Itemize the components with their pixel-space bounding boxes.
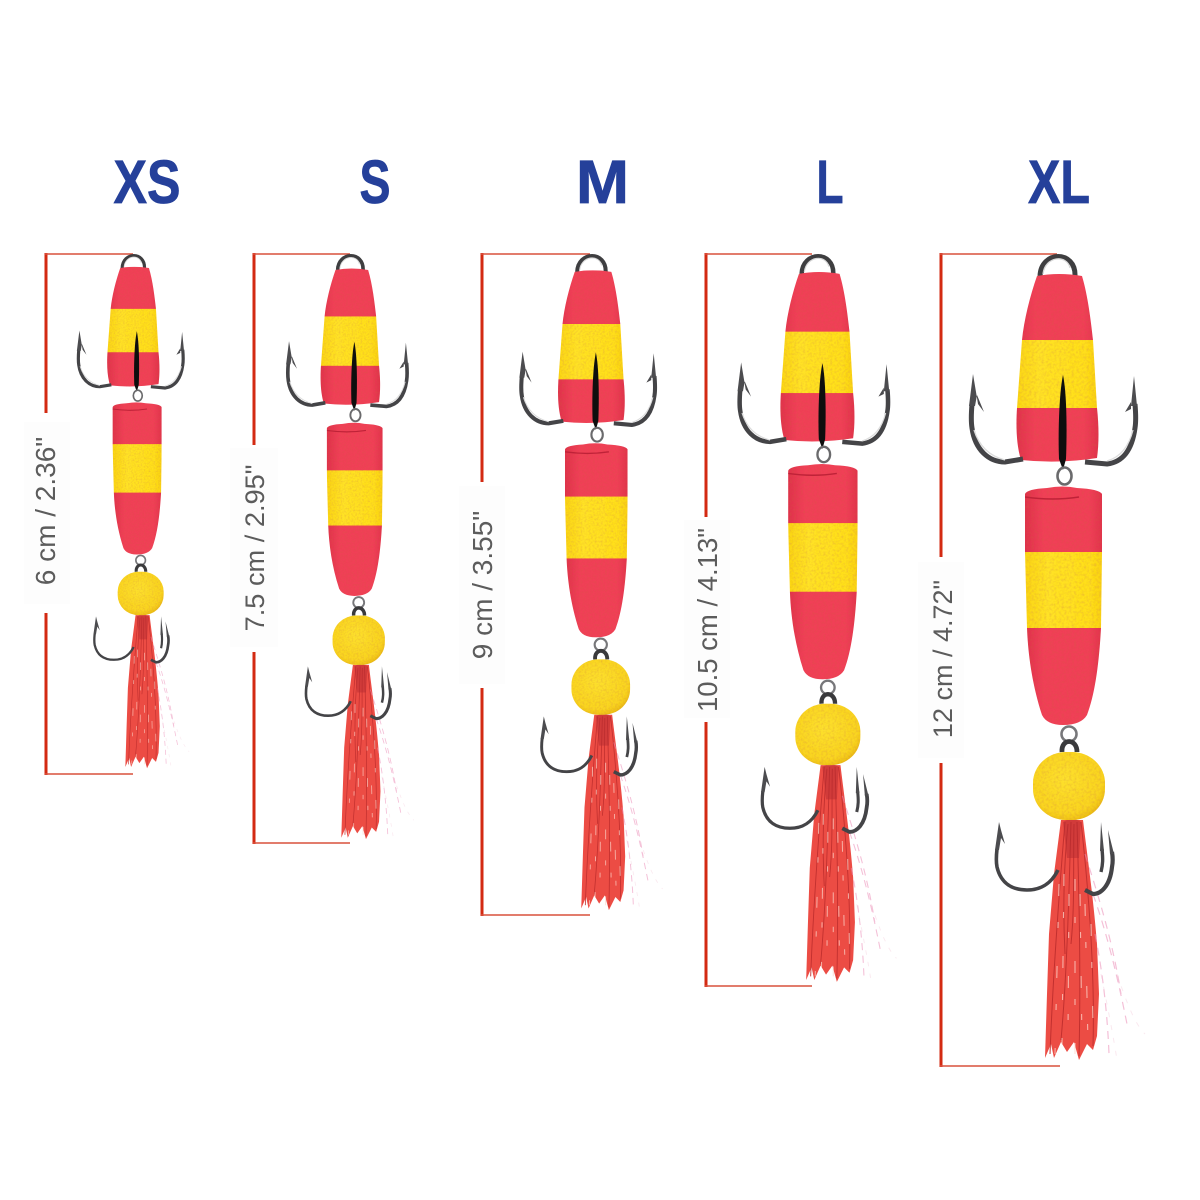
dimension bracket: XS [24, 253, 133, 775]
heading: L: L [816, 148, 844, 216]
tail: M [581, 714, 663, 910]
heading: XS: XS [114, 148, 180, 216]
lure: L [738, 256, 896, 982]
treble hook: XS [77, 331, 184, 401]
size label: L: 10.5 cm / 4.13" [692, 528, 723, 712]
tail: XL [1045, 819, 1145, 1060]
lower float: XL [1022, 482, 1106, 728]
rear hook: M [541, 716, 637, 775]
size label: S: 7.5 cm / 2.95" [239, 465, 270, 631]
tail: L [806, 764, 896, 982]
lower float: XS [111, 399, 164, 556]
dimension bracket: S [230, 253, 350, 844]
top float: XL [1012, 269, 1102, 469]
dimension bracket: XL [918, 253, 1060, 1067]
heading: S: S [360, 148, 390, 216]
dimension bracket: M [459, 253, 590, 916]
lure: S [286, 256, 414, 839]
size label: XL: 12 cm / 4.72" [928, 580, 958, 738]
tail: XS [125, 614, 189, 768]
size label: XS: 6 cm / 2.36" [30, 437, 61, 585]
swivel: S [353, 597, 365, 616]
swivel: M [595, 639, 607, 659]
lure: M [519, 256, 663, 910]
treble hook: XL [969, 374, 1137, 484]
heading: XL: XL [1028, 148, 1090, 216]
rear hook: XS [93, 616, 169, 662]
top float: L [776, 268, 858, 448]
top float: XS [104, 264, 162, 391]
lure: XS [77, 256, 189, 768]
treble hook: M [519, 352, 656, 442]
swivel: L [821, 681, 835, 704]
rear hook: S [305, 666, 391, 719]
heading: M: M [576, 148, 629, 216]
lower float: S [325, 420, 386, 598]
ball: XS [118, 572, 164, 615]
size label: M: 9 cm / 3.55" [467, 511, 498, 659]
lower float: M [563, 440, 631, 640]
rear hook: L [761, 767, 868, 832]
treble hook: S [286, 341, 408, 421]
top float: M [554, 266, 628, 429]
rear hook: XL [995, 822, 1114, 894]
ball: XL [1033, 752, 1105, 820]
swivel: XL [1062, 726, 1077, 752]
ball: M [571, 659, 630, 715]
swivel: XS [136, 555, 146, 572]
ball: L [795, 704, 860, 765]
lower float: L [785, 460, 861, 682]
lure: XL [969, 256, 1145, 1060]
treble hook: L [738, 362, 889, 462]
dimension bracket: L [684, 253, 812, 987]
top float: S [317, 265, 383, 410]
tail: S [341, 664, 414, 839]
ball: S [333, 616, 385, 665]
